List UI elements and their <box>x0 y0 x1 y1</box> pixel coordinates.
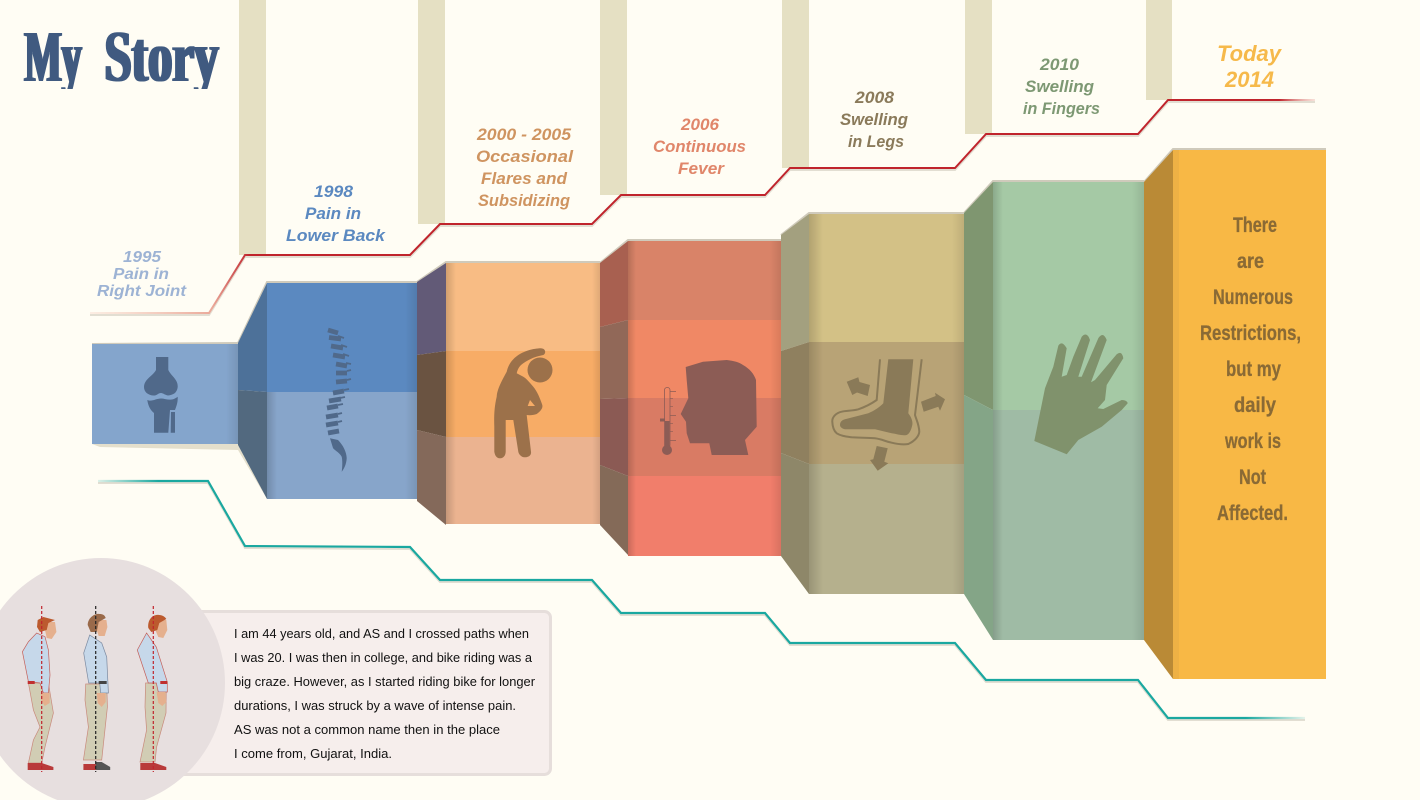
label: 2008 <box>840 88 909 151</box>
panel: today 2014 <box>1144 149 1326 679</box>
icon: spine <box>326 330 351 433</box>
label: 2006: Continuous <box>653 137 746 156</box>
label: 2000-2005: 2000 - 2005 <box>476 125 572 144</box>
label: 1998: Pain in <box>305 204 361 223</box>
panel: 1998 lower back <box>238 282 417 499</box>
text: restrictions message: There <box>1233 214 1277 237</box>
icon: person bending <box>494 348 552 458</box>
text: restrictions message: Numerous <box>1213 286 1293 309</box>
text: restrictions message: work is <box>1224 430 1281 453</box>
text: restrictions message: Restrictions, <box>1200 322 1301 345</box>
title <box>24 32 220 89</box>
icon: spine tail <box>330 438 347 472</box>
text: restrictions message: daily <box>1234 394 1276 417</box>
circle with posture figures <box>0 558 225 800</box>
label: 1995 <box>97 249 187 300</box>
label: 2010: Swelling <box>1025 77 1095 96</box>
label: 1998: Lower Back <box>286 226 387 245</box>
label: 2008: 2008 <box>854 88 895 107</box>
label: 2010 <box>1023 55 1100 118</box>
label: 1995: Right Joint <box>97 283 187 300</box>
icon: swollen foot <box>832 359 945 471</box>
label: 2006: 2006 <box>680 115 720 134</box>
text: restrictions message: Not <box>1239 466 1266 489</box>
story text: I am 44 years old, and AS and I crossed paths when <box>234 626 529 641</box>
label: 1995: Pain in <box>113 266 169 283</box>
label: today 2014: 2014 <box>1224 67 1274 92</box>
icon: thermometer <box>660 388 676 455</box>
figure: stooped posture 1 <box>22 606 56 772</box>
label: 2000-2005: Flares and <box>481 169 568 188</box>
label: 2000-2005: Occasional <box>476 147 574 166</box>
label: 1998: 1998 <box>314 182 354 201</box>
panel: 2008 legs <box>781 213 964 594</box>
story text: durations, I was struck by a wave of intense pain. <box>234 698 516 713</box>
teal timeline line <box>98 481 1305 720</box>
story text: big craze. However, as I started riding bike for longer <box>234 674 536 689</box>
story text <box>234 626 536 761</box>
panel: 2000-2005 flares <box>417 262 600 525</box>
label: 2006: Fever <box>678 159 725 178</box>
title: Story <box>104 16 218 97</box>
story text: AS was not a common name then in the place <box>234 722 500 737</box>
icon: head silhouette <box>681 360 757 455</box>
label: 2008: in Legs <box>848 132 904 151</box>
label: today 2014 <box>1217 41 1283 92</box>
figure: stooped posture 2 <box>137 606 167 772</box>
label: 2000-2005: Subsidizing <box>478 191 571 210</box>
story text box <box>170 612 550 774</box>
text: restrictions message: but my <box>1226 358 1281 381</box>
title: My <box>24 16 82 97</box>
panel: 2010 fingers <box>964 181 1144 640</box>
text: restrictions message <box>1200 214 1301 525</box>
panel: 1995 joint <box>92 343 267 499</box>
text: restrictions message: Affected. <box>1217 502 1288 525</box>
label: 2008: Swelling <box>840 110 909 129</box>
icon: hand <box>1034 334 1128 454</box>
story text: I come from, Gujarat, India. <box>234 746 392 761</box>
label: 2006 <box>653 115 746 178</box>
label: 2000-2005 <box>476 125 574 210</box>
panel: 2006 fever <box>600 240 781 556</box>
label: 1998 <box>286 182 387 245</box>
story text: I was 20. I was then in college, and bike riding was a <box>234 650 533 665</box>
label: 2010: 2010 <box>1039 55 1080 74</box>
icon: knee joint <box>144 357 178 433</box>
red timeline line <box>90 100 1315 315</box>
text: restrictions message: are <box>1237 250 1264 273</box>
label: 1995: 1995 <box>123 249 161 266</box>
label: 2010: in Fingers <box>1023 99 1100 118</box>
label: today 2014: Today <box>1217 41 1283 66</box>
figure: upright posture <box>83 606 110 772</box>
